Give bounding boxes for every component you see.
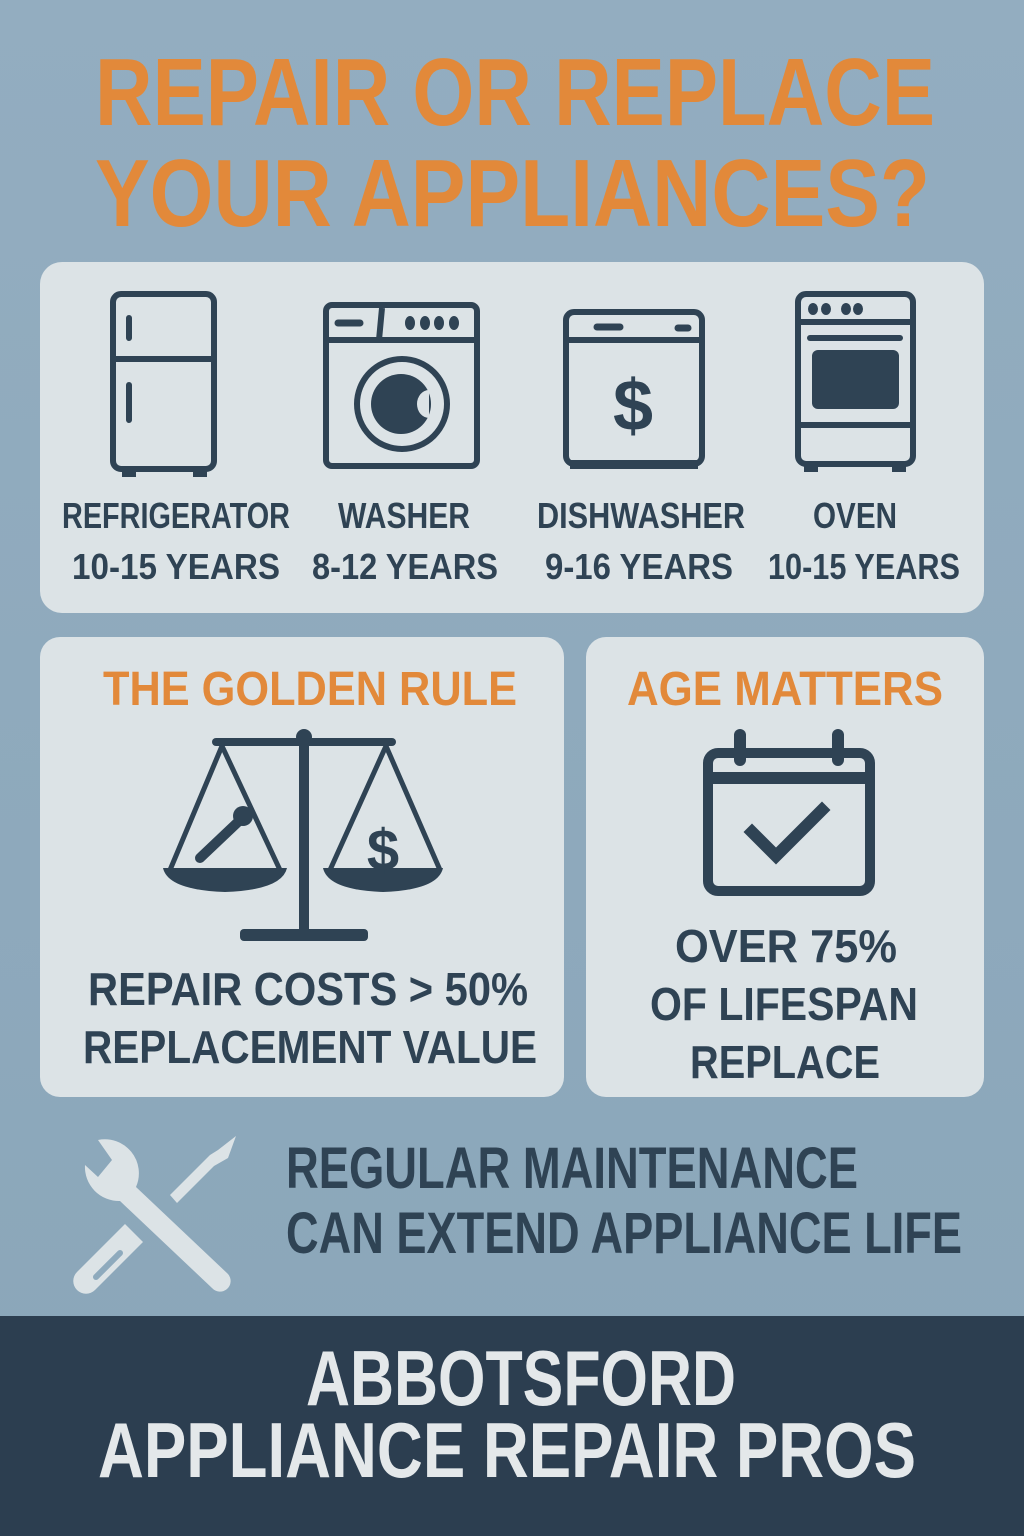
footer [0,1316,1024,1536]
heading: THE GOLDEN RULE [103,663,517,716]
text: rule: REPLACEMENT VALUE [83,1021,537,1073]
text: maintenance: REGULAR MAINTENANCE [286,1136,858,1201]
icon: tools [73,1136,236,1294]
lifespan labels: OVEN [813,495,897,536]
panel: age matters [586,637,984,1097]
text: age: OVER 75% [675,920,897,972]
text: age [650,920,918,1088]
text: age: REPLACE [690,1036,880,1088]
icon: refrigerator [113,294,214,474]
text: age: OF LIFESPAN [650,978,918,1030]
icon: dishwasher: $ [613,366,653,446]
text: maintenance [286,1136,962,1266]
icon: dishwasher [566,312,702,469]
heading: AGE MATTERS [627,663,943,716]
lifespan labels: WASHER [338,495,470,536]
lifespan labels: 10-15 YEARS [72,546,280,587]
lifespan labels: 10-15 YEARS [768,546,960,587]
lifespan labels [62,495,960,587]
title [95,39,935,247]
panel: golden rule [40,637,564,1097]
icon: oven [798,294,913,469]
text: rule: REPAIR COSTS > 50% [88,963,528,1015]
panel: lifespans [40,262,984,613]
footer: ABBOTSFORD [306,1334,736,1422]
icon: calendar [708,735,870,891]
icon: scale: $ [367,818,399,883]
icon: washer [326,305,477,466]
lifespan labels: 8-12 YEARS [312,546,498,587]
icon: scale [163,729,443,941]
lifespan labels: DISHWASHER [537,495,745,536]
lifespan labels: REFRIGERATOR [62,495,290,536]
text: rule [83,963,537,1073]
lifespan labels: 9-16 YEARS [545,546,733,587]
